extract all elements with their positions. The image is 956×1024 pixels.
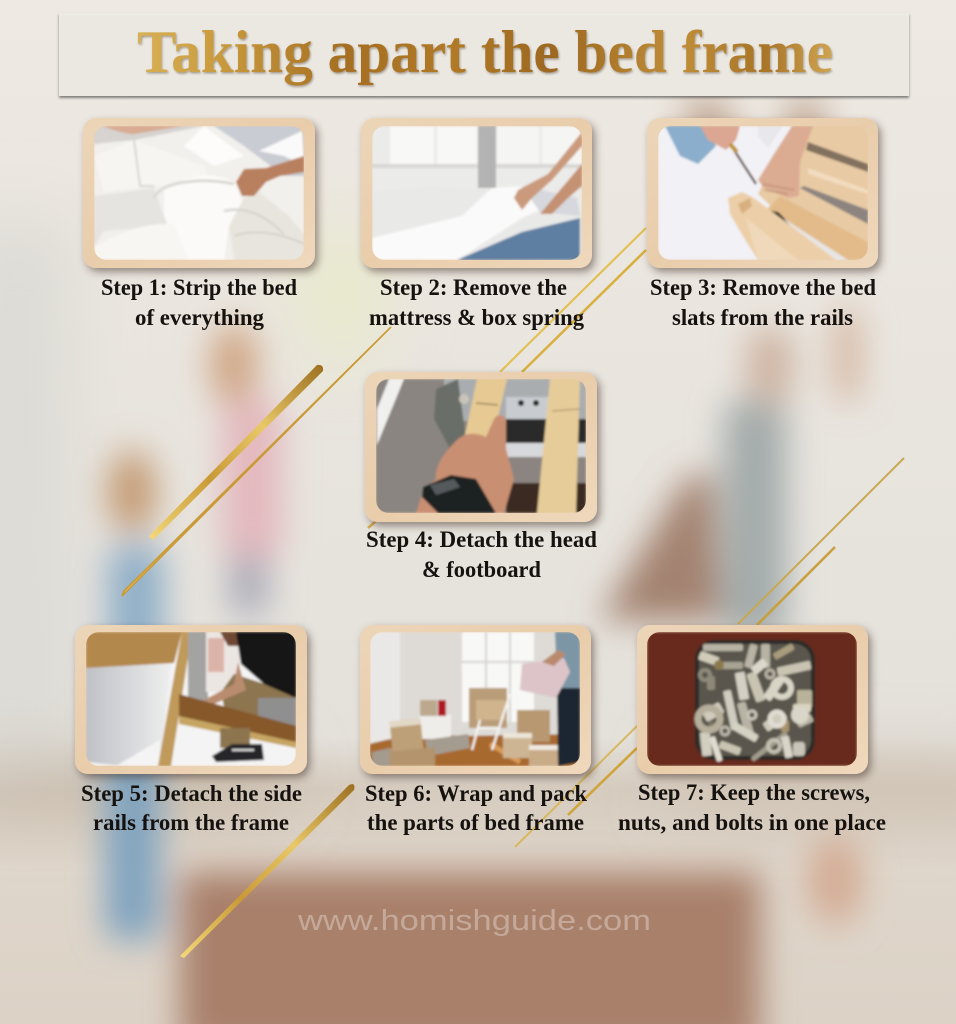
caption (366, 527, 597, 582)
caption: Step 1: Strip the bed (101, 275, 297, 300)
caption (650, 275, 876, 330)
caption: Step 3: Remove the bed (650, 275, 876, 300)
caption: of everything (135, 305, 264, 330)
panel: step 1 (83, 118, 315, 330)
caption: the parts of bed frame (367, 810, 584, 835)
photo: tin of screws, nuts and bolts (647, 632, 857, 766)
caption: Step 7: Keep the screws, (638, 780, 870, 805)
panel: step 6 (360, 625, 591, 835)
panel: step 4 (365, 372, 597, 582)
photo: lifting the mattress (372, 126, 582, 260)
card frame (647, 118, 878, 268)
title: Taking apart the bed frame (137, 19, 833, 85)
panel: step 7 (618, 625, 886, 835)
caption: Step 4: Detach the head (366, 527, 597, 552)
card frame (83, 118, 315, 268)
card frame (75, 625, 307, 774)
panel: step 3 (647, 118, 878, 330)
photo: hands pulling white duvet (94, 126, 304, 260)
caption: mattress & box spring (369, 305, 584, 330)
panel: step 2 (361, 118, 592, 330)
gold line: lower left (180, 784, 354, 958)
title banner (59, 13, 909, 96)
photo: unscrewing bed slats (658, 126, 868, 260)
card frame (365, 372, 597, 522)
caption: Step 6: Wrap and pack (365, 781, 587, 806)
caption: & footboard (422, 557, 541, 582)
decorative gold diagonal lines (122, 228, 904, 958)
caption: Step 5: Detach the side (81, 781, 302, 806)
caption (101, 275, 297, 330)
gold line pair: left middle (122, 327, 391, 596)
photo: hand unscrewing headboard bracket (376, 379, 586, 513)
gold line pair: behind step 4 (368, 228, 646, 528)
card frame (361, 118, 592, 268)
photo: man detaching side rail (86, 632, 296, 766)
caption (618, 780, 886, 835)
photo: room with moving boxes (370, 632, 580, 766)
caption (81, 781, 302, 835)
gold line pair: beside step 6 (515, 726, 637, 847)
card frame (360, 625, 591, 774)
card frame (637, 625, 868, 774)
caption (369, 275, 584, 330)
caption (365, 781, 587, 835)
panel: step 5 (75, 625, 307, 835)
caption: rails from the frame (93, 810, 289, 835)
caption: slats from the rails (672, 305, 853, 330)
caption: nuts, and bolts in one place (618, 810, 886, 835)
caption: Step 2: Remove the (380, 275, 567, 300)
website url: www.homishguide.com (297, 905, 651, 937)
gold line pair: upper right (738, 458, 904, 625)
